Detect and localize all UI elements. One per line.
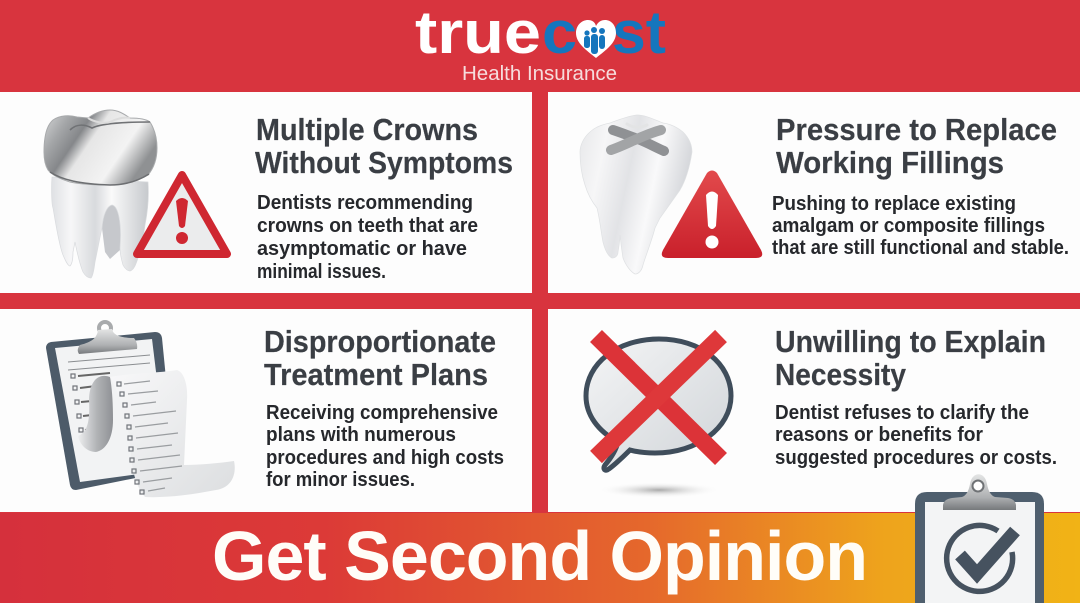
body text: Receiving comprehensive — [266, 402, 498, 424]
heading — [264, 324, 496, 392]
heading — [255, 112, 513, 180]
body text — [772, 193, 1069, 259]
heading: Multiple Crowns — [256, 112, 478, 147]
heading: Pressure to Replace — [776, 112, 1057, 147]
icon: red cross — [596, 336, 721, 459]
logo letters: st: st — [612, 0, 666, 66]
heading — [775, 324, 1046, 392]
body text: minimal issues. — [257, 261, 386, 283]
heading: Disproportionate — [264, 324, 496, 359]
body text — [266, 402, 504, 491]
body text: for minor issues. — [266, 469, 415, 491]
heading: Unwilling to Explain — [775, 324, 1046, 359]
body text: procedures and high costs — [266, 447, 504, 469]
heading — [776, 112, 1057, 180]
logo: truecost Health Insurance — [415, 0, 666, 85]
body text: Dentist refuses to clarify the — [775, 402, 1029, 424]
icon: solid warning triangle — [662, 170, 762, 258]
body text: plans with numerous — [266, 424, 456, 446]
logo letter: c: c — [542, 0, 577, 66]
body text: amalgam or composite fillings — [772, 215, 1045, 237]
body text: asymptomatic or have — [257, 238, 467, 260]
logo word: true: true — [415, 0, 541, 66]
panel: explain necessity — [548, 309, 1080, 512]
logo tagline: Health Insurance — [462, 63, 617, 85]
icon: clipboard with check mark — [915, 474, 1044, 603]
scroll front sheet — [110, 370, 235, 497]
icon: speech bubble crossed out — [586, 336, 731, 498]
scroll back loop — [78, 376, 113, 452]
call-to-action banner — [0, 474, 1080, 603]
body text: crowns on teeth that are — [257, 215, 478, 237]
body text: suggested procedures or costs. — [775, 447, 1057, 469]
amalgam filling — [611, 124, 664, 151]
heading: Working Fillings — [776, 145, 1004, 180]
body text: Dentists recommending — [257, 192, 473, 214]
panel: working fillings — [548, 92, 1080, 293]
icon: tooth with filling — [580, 115, 762, 274]
body text: reasons or benefits for — [775, 424, 983, 446]
icon: crowned tooth — [44, 110, 227, 278]
heading: Necessity — [775, 357, 907, 392]
icon: clipboard with long checklist — [46, 322, 235, 497]
panel: treatment plans — [0, 309, 532, 512]
icon: outlined warning triangle — [137, 175, 227, 254]
body text — [775, 402, 1057, 469]
logo heart with family — [576, 20, 616, 58]
heading: Without Symptoms — [255, 145, 513, 180]
banner text: Get Second Opinion — [212, 517, 868, 595]
heading: Treatment Plans — [264, 357, 488, 392]
body text — [257, 192, 478, 283]
panel: multiple crowns — [0, 92, 532, 293]
body text: Pushing to replace existing — [772, 193, 1016, 215]
